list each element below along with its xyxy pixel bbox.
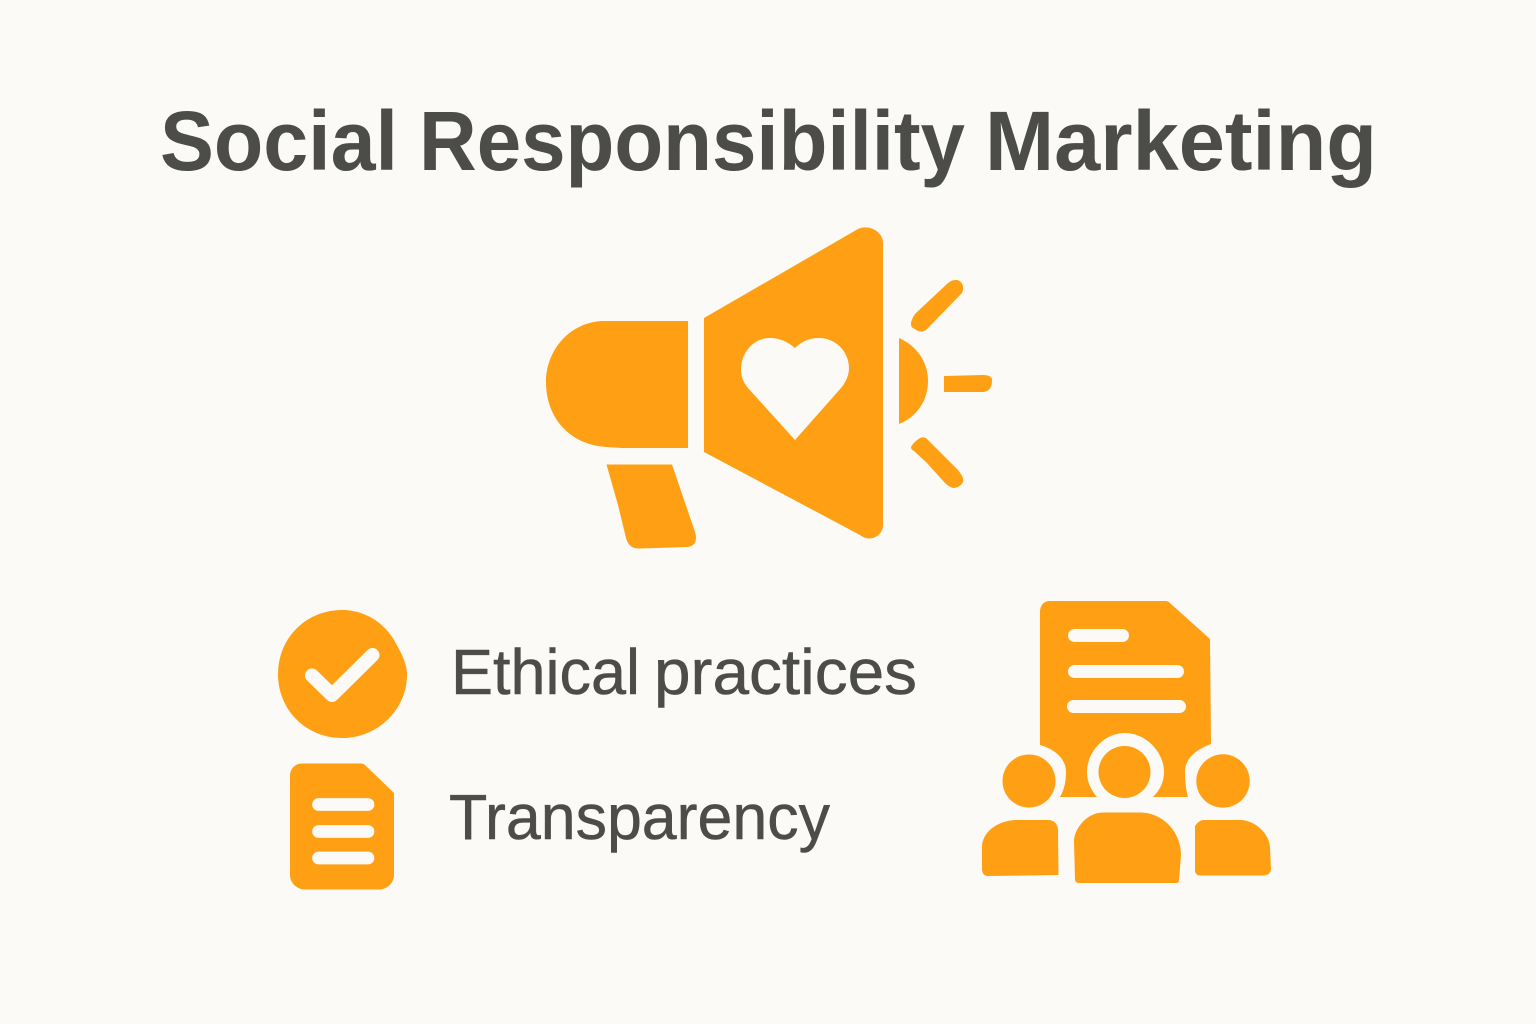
icon: document with people bbox=[982, 601, 1271, 883]
label: ethical practices bbox=[451, 636, 917, 708]
title bbox=[160, 94, 1377, 188]
icon: megaphone with heart bbox=[546, 227, 992, 549]
label: transparency: Transparency bbox=[449, 781, 830, 853]
title: Social bbox=[160, 94, 398, 188]
icon: document small bbox=[290, 764, 394, 890]
label: ethical practices: Ethical bbox=[451, 636, 640, 708]
title: Marketing bbox=[985, 94, 1377, 188]
title: Responsibility bbox=[419, 94, 965, 188]
icon: check circle bbox=[278, 610, 407, 738]
label: ethical practices: practices bbox=[654, 636, 917, 708]
